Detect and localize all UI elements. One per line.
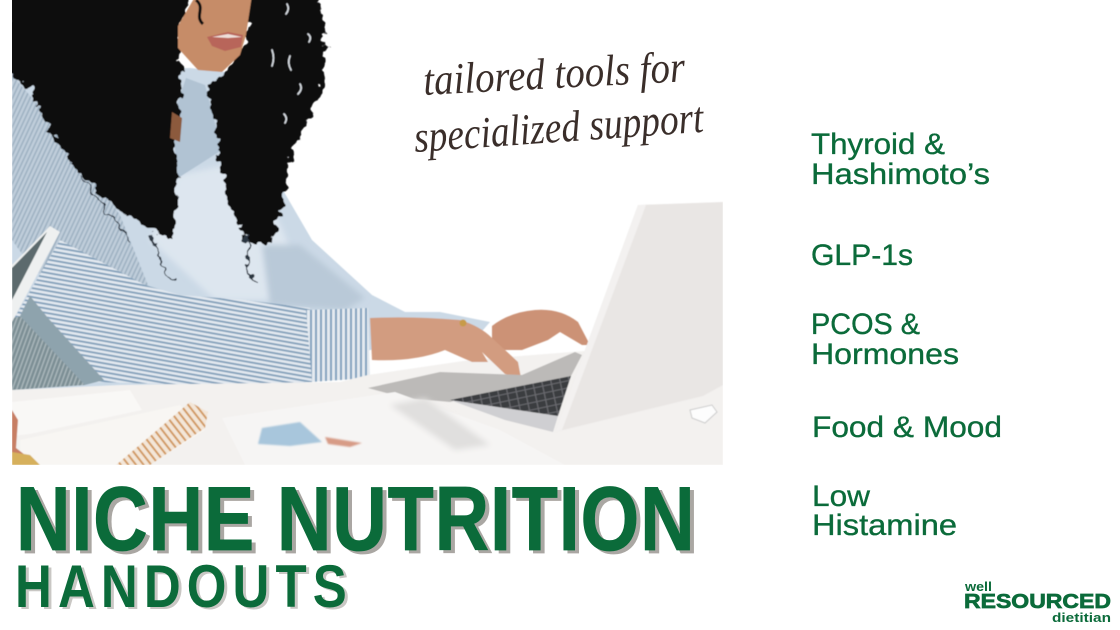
lips — [207, 32, 243, 51]
hair strands — [80, 175, 258, 285]
logo: dietitian: dietitian — [1052, 611, 1111, 625]
title line 1: NICHE NUTRITION — [16, 467, 695, 570]
topic: thyroid: Thyroid & — [811, 128, 945, 161]
topic: GLP-1s: GLP-1s — [811, 239, 913, 272]
gold object — [12, 410, 24, 455]
earbuds — [690, 405, 717, 423]
logo — [964, 579, 1111, 625]
lower left striped shirt — [12, 316, 85, 390]
topic: PCOS: Hormones — [811, 338, 959, 371]
logo: well: well — [964, 579, 992, 594]
keyboard — [450, 376, 571, 416]
collar — [172, 78, 222, 178]
curl on the cheek — [196, 0, 203, 24]
papers on the table — [387, 392, 413, 399]
title line 2 shadow: HANDOUTS — [18, 555, 356, 622]
face — [178, 0, 252, 72]
laptop base — [368, 352, 582, 402]
gaps in the curls — [272, 4, 310, 123]
topic: food and mood: Food & Mood — [812, 411, 1002, 444]
shirt torso — [12, 68, 490, 392]
topic: thyroid: Hashimoto’s — [811, 158, 990, 191]
script tagline — [412, 42, 706, 162]
shirt left shoulder — [12, 76, 148, 286]
shirt shadow area — [262, 245, 365, 310]
title line 2: HANDOUTS — [15, 553, 353, 620]
photo on the paper — [258, 422, 322, 446]
topic: low histamine: Histamine — [812, 509, 957, 542]
logo: resourced: RESOURCED — [964, 591, 1111, 613]
laptop front edge — [450, 400, 558, 432]
far hand — [492, 310, 590, 350]
topic: thyroid — [811, 128, 990, 191]
topic: low histamine — [812, 480, 957, 542]
topic list — [811, 128, 1002, 542]
shirt front light panel — [152, 166, 287, 300]
photo: woman typing on a laptop — [8, 0, 723, 465]
laptop lid — [555, 202, 723, 432]
near hand and fingers — [370, 317, 521, 378]
sleeve fold shadow — [20, 296, 104, 385]
hair — [8, 0, 326, 243]
neck shadow — [170, 112, 182, 142]
ring — [460, 320, 466, 326]
notebook — [20, 405, 205, 465]
sleeve cuff — [306, 308, 370, 382]
title — [15, 467, 699, 622]
topic: PCOS — [811, 308, 959, 371]
tablet on the left — [12, 226, 60, 322]
table surface — [12, 340, 723, 465]
line 2: specialized support — [412, 93, 706, 162]
notebook spiral — [116, 402, 208, 465]
topic: PCOS: PCOS & — [811, 308, 920, 341]
sleeve — [12, 240, 312, 390]
line 1: tailored tools for — [422, 42, 687, 105]
topic: low histamine: Low — [812, 480, 870, 513]
white block on the table — [12, 390, 142, 436]
title line 1 shadow: NICHE NUTRITION — [20, 470, 699, 573]
